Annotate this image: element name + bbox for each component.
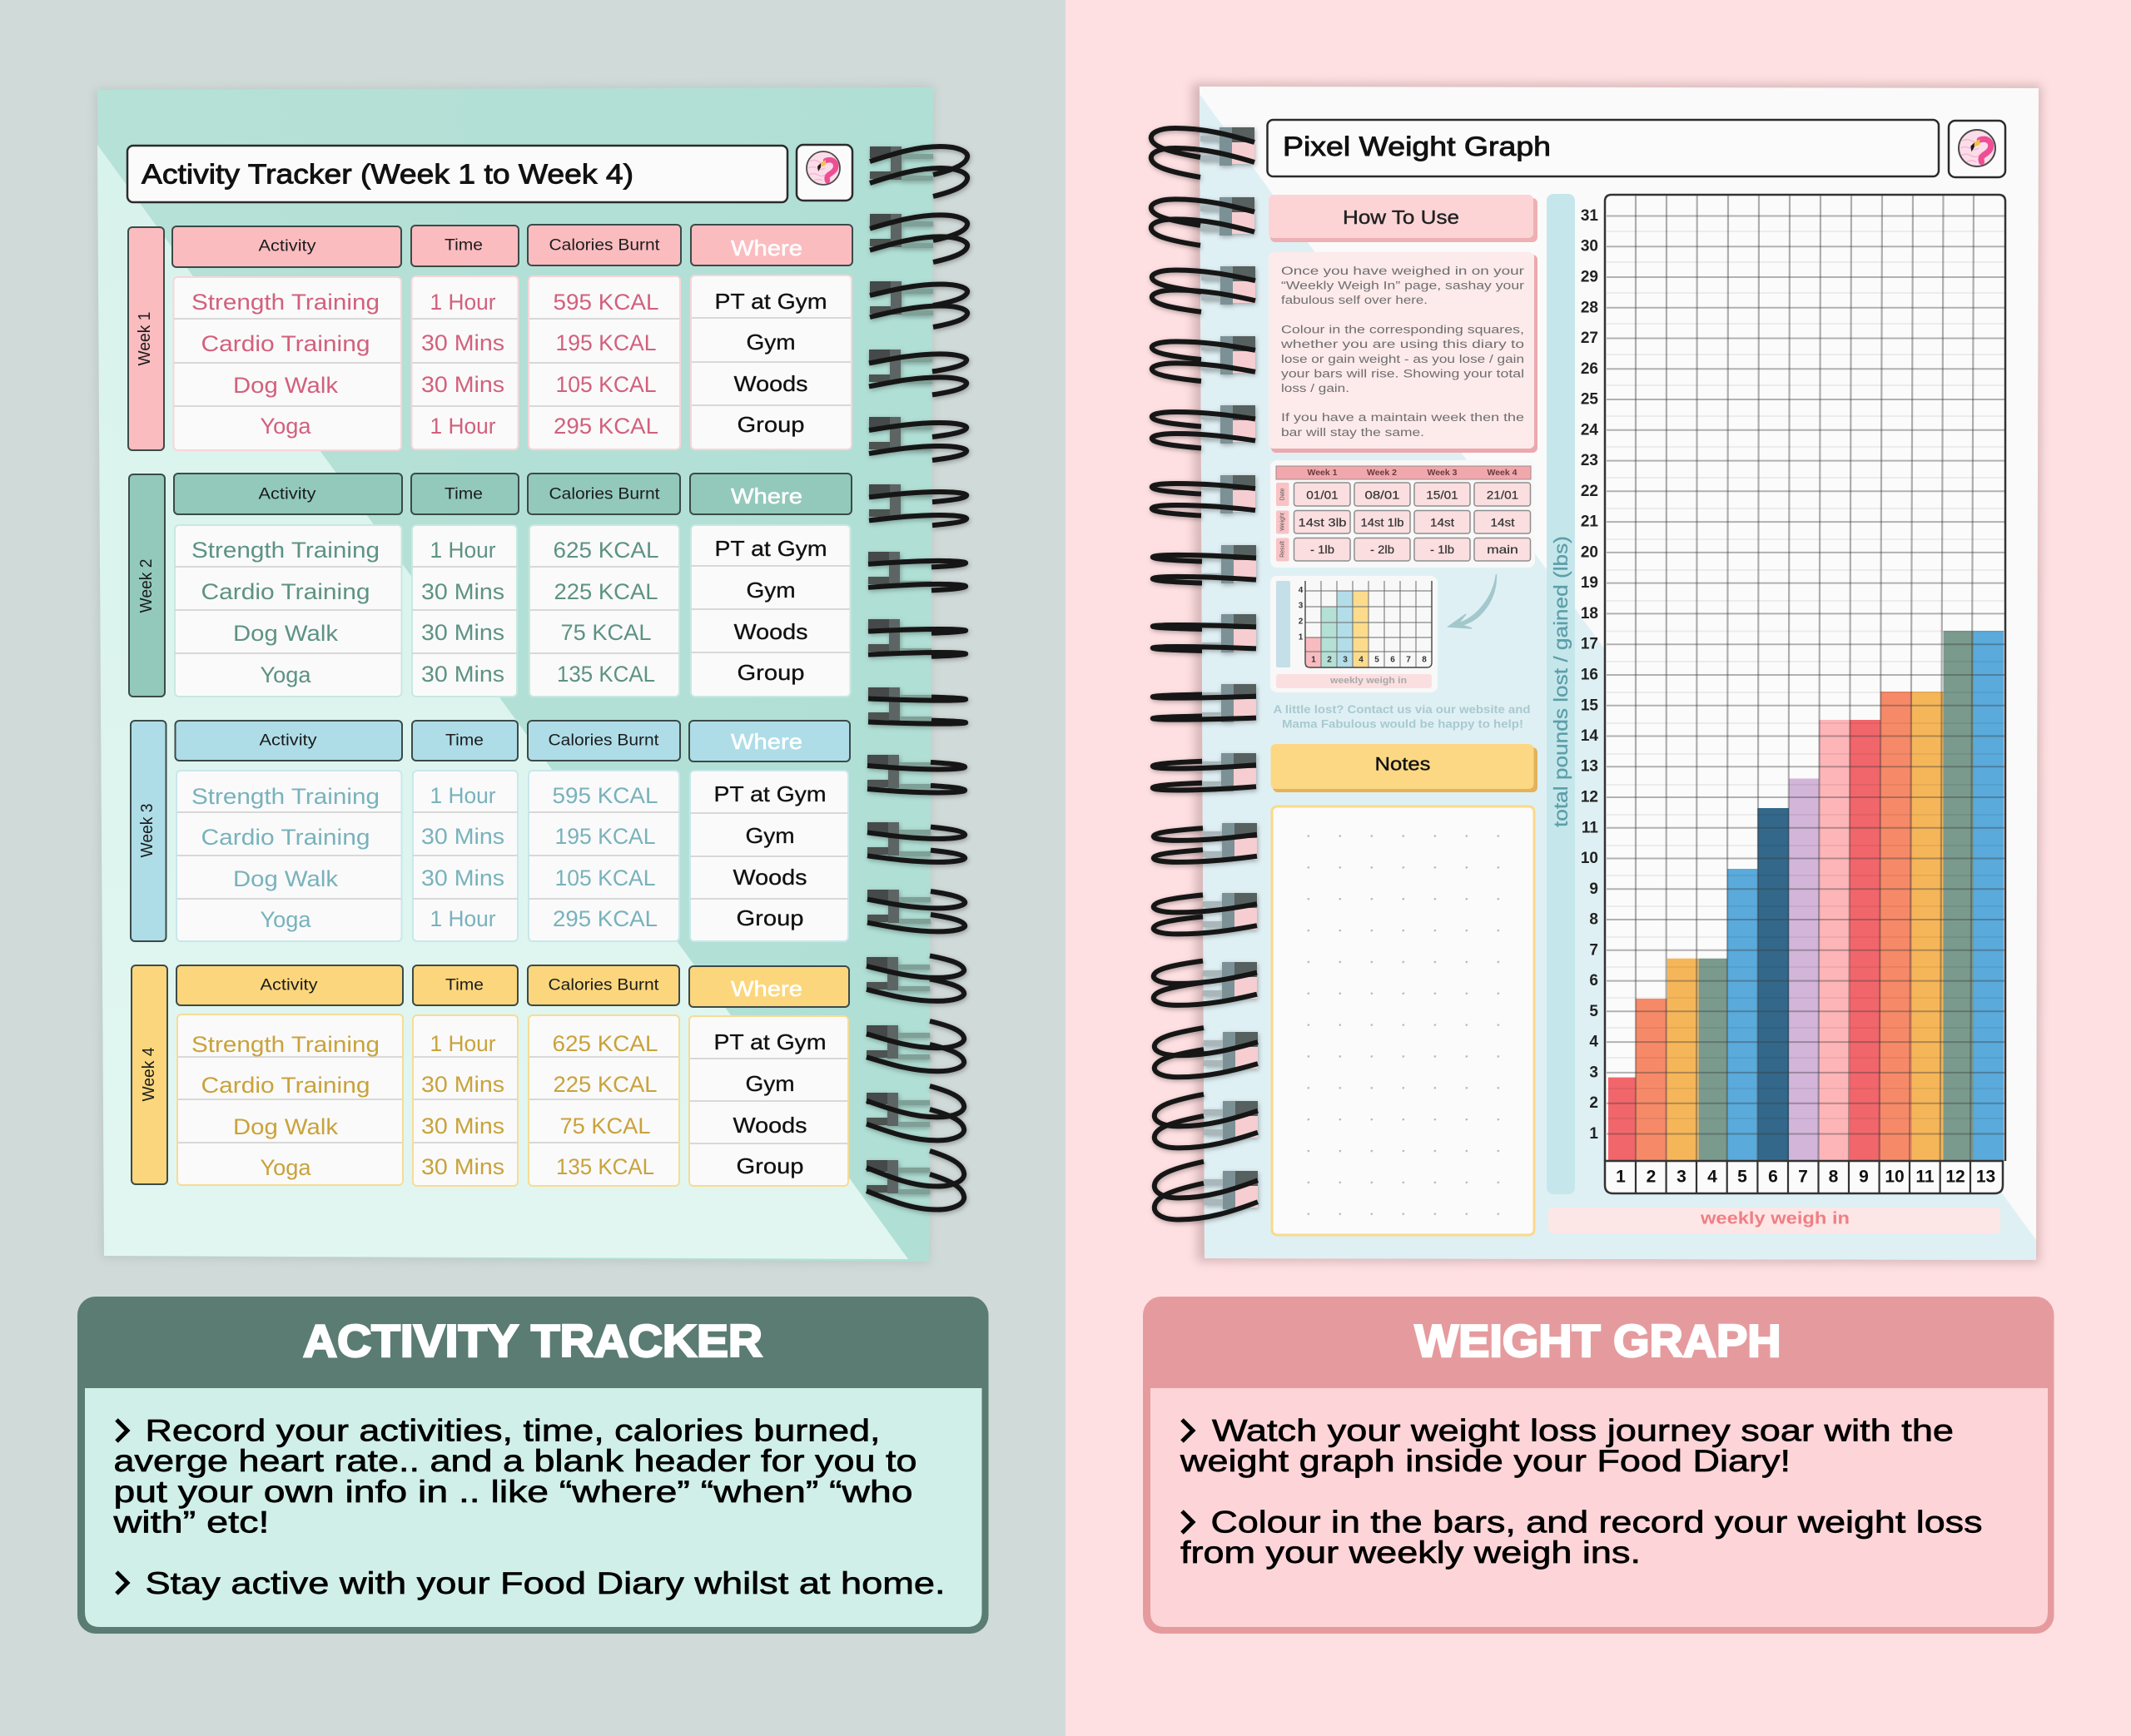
y-axis numbers — [1581, 207, 1598, 1143]
x-axis week number cells: 1 — [1616, 1167, 1626, 1187]
week 4 table cells: Yoga — [260, 1155, 311, 1180]
example mini chart: 5 — [1374, 656, 1379, 664]
title bar: activity tracker page: Activity Tracker (Week 1 to Week 4) — [142, 158, 633, 190]
y-axis numbers: 9 — [1589, 880, 1598, 898]
week 1 table cells: 195 KCAL — [556, 330, 656, 355]
card body text — [1180, 1413, 1983, 1570]
how to use instructions: whether you are using this diary to — [1280, 338, 1524, 350]
week 2 column headers — [174, 474, 852, 514]
week 3 table cells: 595 KCAL — [553, 783, 658, 808]
week 3 table cells: Cardio Training — [201, 825, 370, 850]
week 2 table cells: 30 Mins — [421, 579, 504, 604]
example mini chart: weekly weigh in — [1329, 676, 1407, 686]
example mini chart: 2 — [1299, 618, 1304, 626]
week 3 table cells: PT at Gym — [714, 781, 826, 806]
x-axis week number cells: 13 — [1976, 1167, 1995, 1187]
how to use heading: How To Use — [1343, 206, 1459, 228]
how to use instructions: If you have a maintain week then the — [1281, 411, 1524, 424]
week 4 table cells: 30 Mins — [421, 1154, 504, 1179]
week 3 table cells: Gym — [746, 823, 794, 848]
week 2 table cells: 75 KCAL — [561, 620, 651, 645]
week 4 side tab — [132, 965, 167, 1184]
week 3 table cells: Strength Training — [191, 784, 380, 809]
week 4 table cells: PT at Gym — [714, 1029, 826, 1054]
week 1 table cells: 595 KCAL — [553, 290, 659, 315]
week 2 table cells: Dog Walk — [233, 621, 339, 646]
week 1 table cells: Strength Training — [191, 290, 380, 315]
title bar: pixel weight graph page: Pixel Weight Graph — [1283, 131, 1551, 161]
week 4 table cells: 1 Hour — [430, 1031, 496, 1056]
week 4 column headers: Activity — [260, 977, 318, 994]
y-axis numbers: 5 — [1589, 1003, 1598, 1020]
week 1 side tab: Week 1 — [136, 311, 154, 366]
notes dot grid box — [1272, 806, 1534, 1235]
week 1 table cells: 295 KCAL — [554, 414, 658, 439]
example mini chart: 3 — [1299, 601, 1304, 611]
y-axis numbers: 1 — [1589, 1125, 1598, 1143]
card body text: Record your activities, time, calories burned, — [145, 1413, 881, 1448]
y-axis numbers: 31 — [1581, 207, 1598, 225]
card body text: Colour in the bars, and record your weight loss — [1210, 1505, 1983, 1540]
example weigh-in table: Week 3 — [1427, 468, 1458, 478]
y-axis numbers: 14 — [1581, 727, 1598, 745]
week 1 column headers: Where — [731, 236, 802, 260]
background: right half — [1066, 0, 2131, 1736]
contact note: A little lost? Contact us via our website and — [1274, 702, 1530, 716]
week 3 table cells — [176, 771, 848, 941]
right notebook page — [1192, 83, 2041, 1263]
y-axis numbers: 23 — [1581, 452, 1598, 469]
week 2 table cells: Gym — [746, 578, 796, 603]
notes heading: Notes — [1375, 754, 1430, 774]
y-axis numbers: 7 — [1589, 942, 1598, 959]
week 2 column headers: Where — [731, 484, 802, 508]
panel: week 3 — [131, 721, 850, 941]
x-axis week number cells: 12 — [1945, 1167, 1965, 1187]
x-axis week number cells: 7 — [1798, 1167, 1808, 1187]
week 3 table cells: Dog Walk — [233, 866, 339, 891]
week 4 column headers: Time — [445, 977, 484, 994]
y-axis numbers: 3 — [1589, 1064, 1598, 1082]
y-axis numbers: 29 — [1581, 268, 1598, 286]
how to use heading — [1269, 195, 1537, 242]
example weigh-in table: - 1lb — [1310, 543, 1334, 556]
week 1 table cells: Yoga — [260, 414, 311, 439]
y-axis numbers: 8 — [1589, 910, 1598, 929]
week 1 column headers: Time — [445, 236, 483, 255]
how to use instructions: lose or gain weight - as you lose / gain — [1281, 353, 1524, 365]
contact note: Mama Fabulous would be happy to help! — [1282, 717, 1523, 731]
week 2 table cells: 1 Hour — [430, 538, 496, 563]
x-axis week number cells — [1605, 1161, 2003, 1193]
example mini chart: 1 — [1311, 656, 1316, 664]
x-axis week number cells: 5 — [1737, 1167, 1747, 1187]
week 4 table cells: 75 KCAL — [559, 1114, 651, 1138]
week 4 table cells: 30 Mins — [421, 1072, 504, 1097]
week 3 table cells: Woods — [733, 865, 807, 890]
week 3 table cells: 195 KCAL — [554, 824, 656, 849]
example weigh-in table: 14st — [1430, 516, 1454, 529]
week 3 table cells: 30 Mins — [421, 866, 504, 890]
card: weight graph — [1143, 1297, 2054, 1634]
week 2 column headers: Time — [445, 486, 483, 503]
week 2 table cells: 625 KCAL — [553, 538, 659, 563]
y-axis numbers: 18 — [1581, 605, 1598, 622]
week 4 table cells: 30 Mins — [421, 1114, 504, 1138]
x-axis label strip: weekly weigh in — [1700, 1210, 1850, 1228]
how to use instructions: Once you have weighed in on your — [1281, 265, 1525, 277]
x-axis week number cells: 11 — [1915, 1167, 1935, 1187]
week 1 table cells — [173, 275, 852, 450]
x-axis week number cells: 9 — [1859, 1167, 1869, 1187]
x-axis week number cells: 8 — [1829, 1167, 1839, 1187]
week 4 table cells: 225 KCAL — [553, 1072, 658, 1097]
week 3 table cells: 295 KCAL — [553, 906, 658, 931]
card heading: WEIGHT GRAPH — [1415, 1315, 1781, 1366]
week 3 table cells: 105 KCAL — [554, 866, 656, 890]
week 3 table cells: 1 Hour — [430, 783, 496, 808]
y-axis numbers: 20 — [1581, 544, 1598, 561]
card body text: Stay active with your Food Diary whilst at home. — [145, 1566, 946, 1600]
week 3 table cells: 1 Hour — [430, 906, 496, 931]
example weigh-in table: 14st — [1490, 516, 1515, 529]
example weigh-in table: - 2lb — [1370, 543, 1394, 556]
example mini chart: 4 — [1299, 586, 1304, 595]
example weigh-in table: Week 2 — [1367, 468, 1397, 478]
week 1 table cells: 30 Mins — [421, 330, 504, 355]
background: left half — [0, 0, 1066, 1736]
example weigh-in table: 01/01 — [1306, 488, 1339, 501]
y-axis numbers: 11 — [1582, 819, 1598, 837]
how to use instructions — [1269, 252, 1537, 453]
week 4 column headers: Where — [731, 976, 802, 1001]
week 3 table cells: 30 Mins — [421, 824, 504, 849]
y-axis label strip: total pounds lost / gained (lbs) — [1550, 536, 1572, 827]
week 3 column headers: Time — [445, 732, 484, 749]
example mini chart: 2 — [1327, 656, 1332, 664]
example weigh-in table: 14st 1lb — [1360, 516, 1404, 529]
left notebook page — [96, 86, 933, 1263]
y-axis numbers: 13 — [1581, 757, 1598, 776]
week 1 table cells: 105 KCAL — [556, 372, 656, 397]
example weigh-in table: 14st 3lb — [1299, 516, 1347, 529]
example weigh-in table: 21/01 — [1487, 488, 1518, 501]
example mini chart: 7 — [1406, 656, 1411, 664]
how to use instructions: fabulous self over here. — [1281, 294, 1428, 306]
week 1 table cells: Cardio Training — [201, 331, 370, 356]
x-axis week number cells: 4 — [1707, 1167, 1717, 1187]
week 3 column headers — [175, 721, 850, 761]
bars: 13 weekly weigh-ins — [1608, 631, 2004, 1161]
week 2 table cells: 225 KCAL — [554, 579, 658, 604]
y-axis numbers: 12 — [1581, 789, 1598, 806]
card: activity tracker — [77, 1297, 989, 1634]
week 2 table cells: 30 Mins — [421, 662, 504, 687]
example mini chart — [1270, 576, 1438, 692]
y-axis numbers: 24 — [1581, 421, 1598, 439]
card body text: put your own info in .. like “where” “when” “who — [113, 1475, 912, 1509]
week 2 table cells: PT at Gym — [714, 536, 827, 561]
example weigh-in table: Week 4 — [1487, 468, 1518, 478]
contact note — [1274, 702, 1530, 731]
week 2 table cells: Group — [738, 660, 804, 685]
week 1 table cells: Gym — [746, 330, 796, 355]
card body text: averge heart rate.. and a blank header for you to — [113, 1444, 917, 1478]
y-axis numbers: 4 — [1589, 1034, 1598, 1050]
week 4 table cells: Gym — [746, 1071, 794, 1096]
y-axis numbers: 10 — [1581, 850, 1598, 867]
spiral binding: left page — [867, 146, 967, 1210]
week 1 table cells: PT at Gym — [714, 289, 827, 314]
week 4 table cells: Group — [736, 1153, 804, 1178]
week 2 table cells: 135 KCAL — [557, 662, 655, 687]
week 1 column headers: Calories Burnt — [549, 236, 660, 255]
week 2 table cells: Yoga — [260, 662, 311, 687]
week 2 column headers: Calories Burnt — [549, 486, 660, 503]
week 1 table cells: 30 Mins — [421, 372, 504, 397]
y-axis numbers: 26 — [1581, 360, 1598, 378]
example weigh-in table: Result — [1280, 541, 1285, 558]
week 4 table cells: Woods — [733, 1113, 807, 1138]
week 3 side tab — [131, 721, 166, 941]
example mini chart: 1 — [1299, 632, 1304, 642]
week 3 column headers: Calories Burnt — [548, 732, 659, 749]
x-axis week number cells: 6 — [1768, 1167, 1778, 1187]
example weigh-in table — [1270, 460, 1535, 568]
spiral binding: right page — [1151, 127, 1258, 1220]
week 3 column headers: Activity — [260, 732, 317, 749]
y-axis label strip — [1547, 194, 1575, 1194]
week 4 column headers — [176, 965, 849, 1007]
example mini chart: 4 — [1359, 656, 1364, 664]
week 1 table cells: 1 Hour — [430, 290, 496, 315]
example weigh-in table: Week 1 — [1307, 468, 1338, 478]
example weigh-in table: main — [1487, 543, 1518, 556]
week 2 table cells: Strength Training — [191, 538, 380, 563]
week 2 side tab — [129, 474, 165, 697]
example weigh-in table: Date — [1280, 489, 1285, 500]
week 1 column headers: Activity — [258, 238, 316, 255]
notes heading — [1270, 744, 1537, 792]
week 2 table cells: Cardio Training — [201, 579, 370, 604]
chart: pixel weight bar graph — [1581, 195, 2005, 1193]
card body text: weight graph inside your Food Diary! — [1180, 1444, 1791, 1478]
title bar: pixel weight graph page — [1267, 120, 1939, 176]
example weigh-in table: 08/01 — [1365, 488, 1400, 501]
y-axis numbers: 6 — [1589, 972, 1598, 990]
card body text: Watch your weight loss journey soar with the — [1212, 1413, 1954, 1448]
card body text: from your weekly weigh ins. — [1180, 1535, 1641, 1570]
y-axis numbers: 25 — [1581, 391, 1598, 408]
y-axis numbers: 2 — [1589, 1094, 1598, 1112]
example mini chart: 6 — [1390, 656, 1395, 664]
example mini chart: 3 — [1343, 656, 1348, 664]
week 1 table cells: 1 Hour — [430, 414, 496, 439]
example weigh-in table: 15/01 — [1426, 488, 1458, 501]
how to use instructions: Colour in the corresponding squares, — [1281, 323, 1524, 336]
y-axis numbers: 28 — [1581, 300, 1598, 316]
week 2 table cells: 30 Mins — [421, 620, 504, 645]
y-axis numbers: 30 — [1581, 238, 1598, 255]
y-axis numbers: 15 — [1581, 697, 1598, 714]
icon: flamingo badge, graph page — [1949, 121, 2005, 177]
y-axis numbers: 19 — [1581, 574, 1598, 592]
how to use instructions: bar will stay the same. — [1281, 426, 1424, 439]
x-axis label strip — [1548, 1208, 2000, 1233]
week 3 table cells: Yoga — [260, 907, 311, 932]
x-axis week number cells: 3 — [1676, 1167, 1686, 1187]
x-axis week number cells: 10 — [1885, 1167, 1905, 1187]
week 3 column headers: Where — [731, 729, 802, 754]
week 3 side tab: Week 3 — [138, 804, 156, 857]
week 1 table cells: Dog Walk — [233, 373, 339, 398]
card heading: ACTIVITY TRACKER — [303, 1315, 762, 1366]
card body text — [112, 1413, 946, 1600]
example mini chart: 8 — [1422, 656, 1427, 664]
y-axis numbers: 16 — [1581, 666, 1598, 684]
title bar: activity tracker page — [127, 146, 787, 202]
card body text: with” etc! — [112, 1505, 270, 1540]
week 1 table cells: Group — [738, 412, 804, 437]
week 4 side tab: Week 4 — [140, 1047, 158, 1102]
icon: flamingo badge, activity page — [797, 145, 852, 201]
y-axis numbers: 17 — [1581, 636, 1598, 652]
panel: week 1 — [128, 225, 852, 450]
x-axis week number cells: 2 — [1647, 1167, 1656, 1187]
week 2 table cells — [175, 525, 851, 697]
week 4 table cells — [177, 1014, 848, 1186]
how to use instructions: your bars will rise. Showing your total — [1281, 368, 1524, 379]
week 1 side tab — [128, 227, 164, 450]
y-axis numbers: 22 — [1581, 483, 1598, 500]
week 1 table cells: Woods — [734, 371, 807, 396]
week 4 column headers: Calories Burnt — [548, 977, 659, 994]
week 4 table cells: Dog Walk — [233, 1114, 339, 1139]
example weigh-in table: - 1lb — [1430, 543, 1454, 556]
week 1 column headers — [172, 225, 852, 267]
week 2 table cells: Woods — [734, 619, 807, 644]
week 4 table cells: Strength Training — [191, 1032, 380, 1057]
arrow: from table to mini chart — [1448, 574, 1497, 628]
week 4 table cells: Cardio Training — [201, 1073, 370, 1098]
week 3 table cells: Group — [736, 905, 804, 930]
week 2 column headers: Activity — [258, 486, 316, 503]
y-axis numbers: 27 — [1581, 330, 1598, 347]
week 4 table cells: 135 KCAL — [556, 1154, 654, 1179]
panel: week 4 — [132, 965, 849, 1186]
example weigh-in table: Weight — [1280, 513, 1285, 531]
panel: week 2 — [129, 474, 852, 697]
y-axis numbers: 21 — [1581, 513, 1598, 531]
how to use instructions: loss / gain. — [1281, 382, 1349, 394]
week 2 side tab: Week 2 — [137, 559, 156, 613]
week 4 table cells: 625 KCAL — [553, 1031, 658, 1056]
how to use instructions: “Weekly Weigh In” page, sashay your — [1281, 280, 1525, 291]
